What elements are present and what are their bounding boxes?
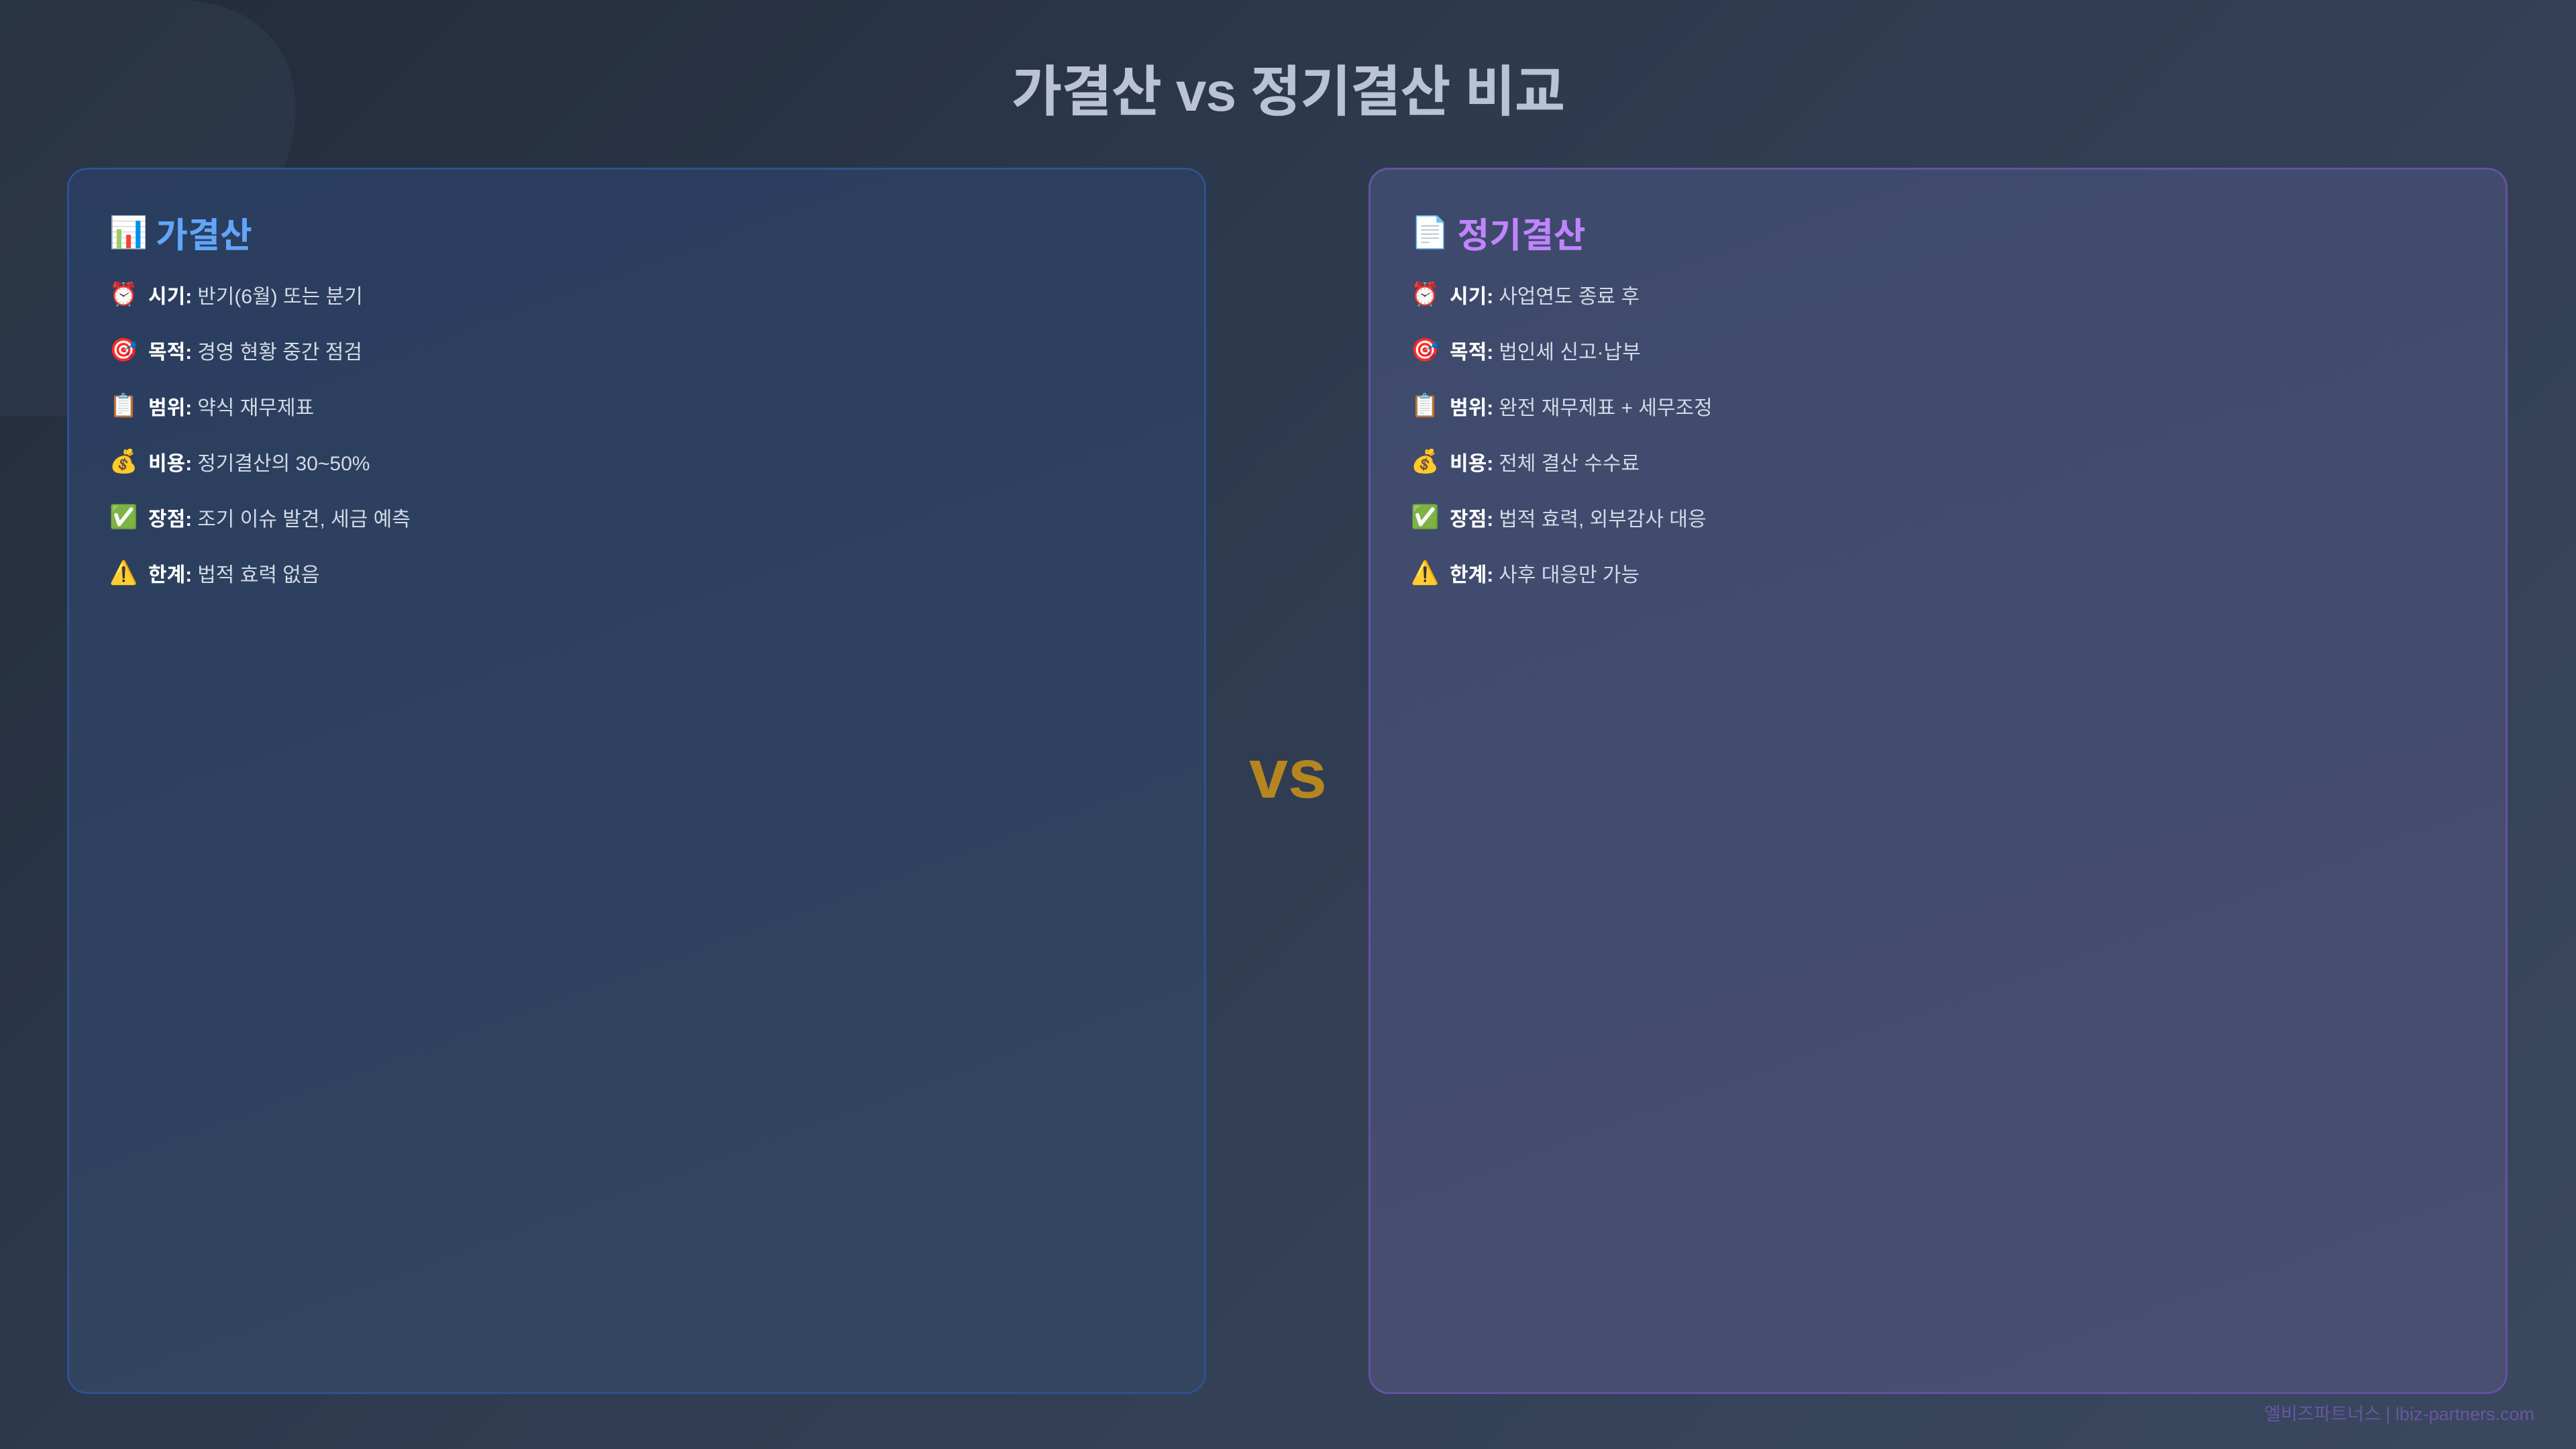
item: 한계 — [1411, 559, 1640, 586]
footer: 엘비즈파트너스 | lbiz-partners.com — [2264, 1404, 2534, 1424]
vs label: vs — [1249, 735, 1327, 813]
item: 목적: 🎯 — [1411, 337, 1439, 363]
item: 장점: 장점: — [1450, 508, 1493, 531]
item: 시기: 시기: — [1450, 286, 1493, 308]
item: 시기: ⏰ — [109, 282, 138, 307]
panel: 정기결산 — [1368, 168, 2508, 1394]
item: 범위 — [109, 393, 314, 419]
heading: 가결산 — [109, 215, 252, 256]
item: 범위: 약식 재무제표 — [197, 397, 314, 419]
heading: 정기결산 — [1411, 215, 1586, 256]
item: 범위: 📋 — [1411, 393, 1439, 419]
item: 비용: 💰 — [1411, 449, 1439, 474]
item: 비용: 💰 — [109, 449, 138, 474]
item: 한계: ⚠️ — [109, 560, 138, 586]
item: 목적 — [1411, 337, 1641, 364]
item: 범위: 범위: — [1450, 397, 1493, 419]
item: 한계: 한계: — [1450, 564, 1493, 586]
item: 비용 — [109, 448, 370, 475]
item: 장점: 법적 효력, 외부감사 대응 — [1499, 508, 1707, 531]
item: 목적: 법인세 신고·납부 — [1499, 341, 1641, 364]
item: 목적: 경영 현황 중간 점검 — [197, 341, 362, 364]
item: 목적 — [109, 337, 362, 364]
item: 시기: 시기: — [148, 286, 192, 308]
item: 범위: 범위: — [148, 397, 192, 419]
item: 한계: 한계: — [148, 564, 192, 586]
item: 목적: 🎯 — [109, 337, 138, 363]
title: 가결산 vs 정기결산 비교 — [1012, 62, 1564, 123]
item: 비용: 전체 결산 수수료 — [1499, 453, 1640, 475]
item: 목적: 목적: — [1450, 341, 1493, 364]
item: 범위: 📋 — [109, 393, 138, 419]
item: 시기 — [1411, 282, 1640, 308]
item: 시기 — [109, 282, 363, 308]
item: 범위: 완전 재무제표 + 세무조정 — [1499, 397, 1713, 419]
heading: 정기결산: 📄 — [1411, 215, 1449, 250]
item: 장점: ✅ — [1411, 504, 1439, 530]
item: 시기: ⏰ — [1411, 282, 1439, 307]
item: 비용 — [1411, 448, 1640, 475]
item: 장점: ✅ — [109, 504, 138, 530]
item: 한계: ⚠️ — [1411, 560, 1439, 586]
item: 시기: 반기(6월) 또는 분기 — [197, 286, 363, 308]
item: 장점: 장점: — [148, 508, 192, 531]
heading: 정기결산: 정기결산 — [1457, 217, 1586, 256]
item: 시기: 사업연도 종료 후 — [1499, 286, 1640, 308]
item: 한계 — [109, 559, 319, 586]
item: 비용: 정기결산의 30~50% — [197, 453, 370, 475]
item: 비용: 비용: — [1450, 453, 1493, 475]
item: 장점 — [109, 504, 411, 531]
item: 범위 — [1411, 393, 1713, 419]
item: 한계: 사후 대응만 가능 — [1499, 564, 1640, 586]
heading: 가결산: 📊 — [109, 215, 148, 250]
heading: 가결산: 가결산 — [156, 217, 252, 256]
panel: 가결산 — [67, 168, 1206, 1394]
item: 장점 — [1411, 504, 1707, 531]
item: 장점: 조기 이슈 발견, 세금 예측 — [197, 508, 411, 531]
item: 목적: 목적: — [148, 341, 192, 364]
item: 비용: 비용: — [148, 453, 192, 475]
item: 한계: 법적 효력 없음 — [197, 564, 319, 586]
